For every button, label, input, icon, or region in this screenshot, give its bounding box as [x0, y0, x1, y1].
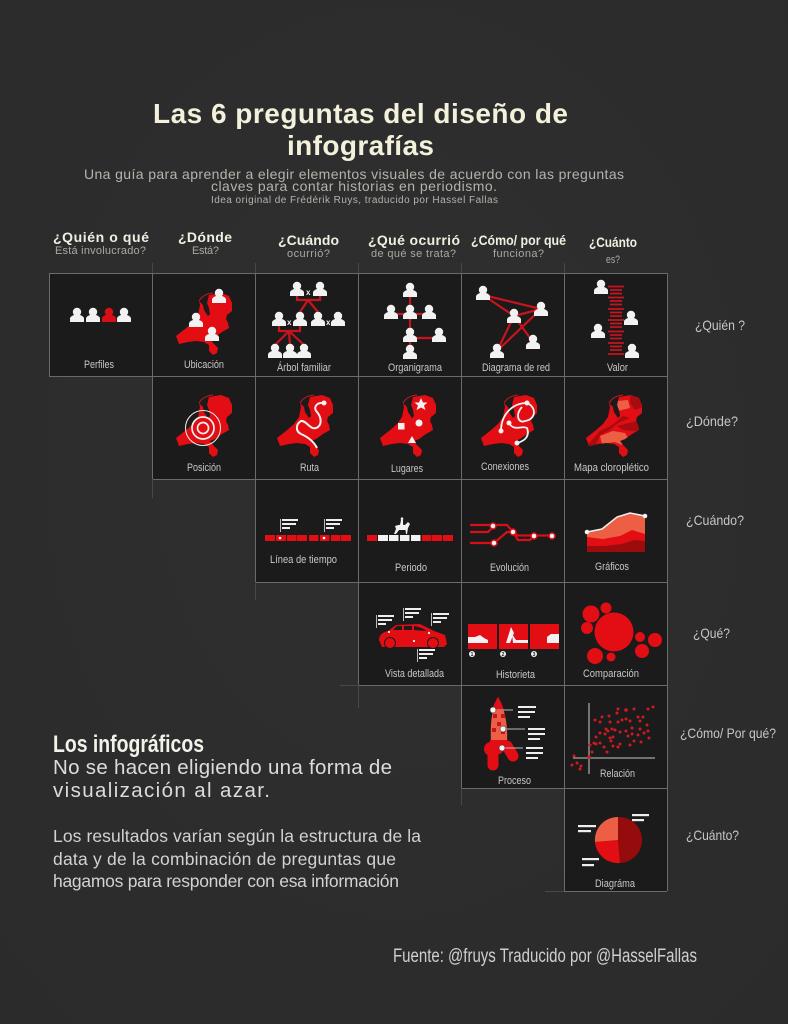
cell: Ubicación [176, 289, 232, 371]
cell: Historieta: 2 [502, 652, 505, 658]
cell: Historieta: 3 [533, 652, 536, 658]
row labels: ¿Qué? [693, 625, 730, 641]
cell: Evolución [470, 523, 555, 574]
column headers: funciona? [493, 248, 544, 260]
cell: Relación [570, 703, 655, 780]
subtitle: Una guía para aprender a elegir elementos visuales de acuerdo con las preguntas [84, 166, 624, 182]
cell: Comparación [581, 602, 662, 680]
cell: Árbol familiar: x [306, 288, 311, 297]
text block: resultados: hagamos para responder con esa información [53, 871, 399, 891]
text block: resultados: Los resultados varían según la estructura de la [53, 826, 421, 846]
cell: Árbol familiar: Árbol familiar [277, 361, 331, 374]
cell: Diagrama de red [476, 286, 550, 374]
column headers [53, 229, 637, 266]
cell: Mapa coroplético: Mapa cloroplético [574, 462, 649, 474]
cell: Conexiones: Conexiones [481, 461, 529, 473]
cell: Conexiones [481, 395, 537, 473]
column headers: Está? [192, 245, 219, 257]
title: Las 6 preguntas del diseño de [153, 98, 568, 129]
icon: horse [394, 517, 410, 534]
cell: Valor: Valor [607, 362, 628, 374]
column headers: ¿Quién o qué [53, 229, 149, 245]
row labels: ¿Cómo/ Por qué? [680, 725, 776, 741]
text block: Los infográficos: visualización al azar. [53, 779, 270, 802]
column headers: ¿Cuánto [589, 234, 637, 250]
column headers: ocurrió? [287, 248, 330, 260]
column headers: ¿Dónde [178, 229, 232, 245]
cell: Vista detallada: Vista detallada [385, 668, 445, 680]
text block: Los infográficos: Los infográficos [53, 731, 204, 758]
title: infografías [287, 130, 434, 161]
row labels [680, 317, 776, 843]
cell: Gráficos [585, 513, 647, 573]
row labels: ¿Dónde? [686, 413, 738, 429]
cell: Ruta: Ruta [300, 462, 320, 474]
cell: Árbol familiar [268, 282, 345, 374]
subtitle: Idea original de Frédérik Ruys, traducido por Hassel Fallas [211, 195, 498, 206]
column headers: ¿Qué ocurrió [368, 232, 460, 248]
cell: Árbol familiar: x [287, 318, 292, 327]
text block: Los infográficos [53, 731, 392, 802]
cell: Ruta [277, 395, 333, 474]
source: Fuente: @fruys Traducido por @HasselFallas [393, 946, 697, 967]
row labels: ¿Cuándo? [686, 512, 744, 528]
cell: Proceso: Proceso [498, 775, 531, 787]
subtitle: claves para contar historias en periodismo. [211, 178, 497, 194]
cell: Árbol familiar: x [326, 318, 331, 327]
cell: Historieta: Historieta [496, 669, 536, 681]
text block: resultados: data y de la combinación de preguntas que [53, 849, 396, 869]
text block: Los infográficos: No se hacen eligiendo una forma de [53, 756, 392, 779]
row labels: ¿Cuánto? [686, 827, 739, 843]
cell: Valor [591, 280, 639, 374]
cell: Diagrama: Diagráma [595, 878, 636, 890]
cell: Vista detallada [376, 608, 449, 680]
cell: Línea de tiempo: Línea de tiempo [270, 554, 337, 566]
cell: Diagrama [578, 814, 649, 890]
cell: Perfiles [70, 308, 131, 371]
cell: Posición [176, 395, 232, 474]
cell: Proceso [484, 697, 545, 787]
cell: Organigrama: Organigrama [388, 362, 443, 374]
row labels: ¿Quién ? [695, 317, 745, 333]
cell: Periodo [367, 517, 453, 574]
cell: Historieta: 1 [471, 652, 474, 658]
cell: Ubicación: Ubicación [184, 359, 224, 371]
text block: resultados [53, 826, 421, 891]
cell: Lugares: Lugares [391, 463, 423, 475]
cell: Organigrama [384, 283, 446, 374]
cell: Gráficos: Gráficos [595, 561, 629, 573]
column headers: ¿Cuándo [278, 232, 339, 248]
cell: Comparación: Comparación [583, 668, 639, 680]
column headers: de qué se trata? [371, 248, 456, 260]
column headers: es? [606, 254, 620, 266]
subtitle [84, 166, 624, 206]
cell: Historieta [468, 624, 559, 681]
cell: Evolución: Evolución [490, 562, 529, 574]
column headers: Está involucrado? [55, 245, 146, 257]
cell: Lugares [380, 395, 436, 475]
cell: Perfiles: Perfiles [84, 359, 114, 371]
cell: Periodo: Periodo [395, 562, 427, 574]
cell: Relación: Relación [600, 768, 635, 780]
column headers: ¿Cómo/ por qué [471, 232, 566, 248]
grid cells [49, 273, 667, 891]
cell: Posición: Posición [187, 462, 221, 474]
cell: Línea de tiempo [265, 519, 351, 566]
cell: Diagrama de red: Diagrama de red [482, 362, 550, 374]
title [153, 98, 568, 161]
cell: Mapa coroplético [574, 394, 649, 474]
